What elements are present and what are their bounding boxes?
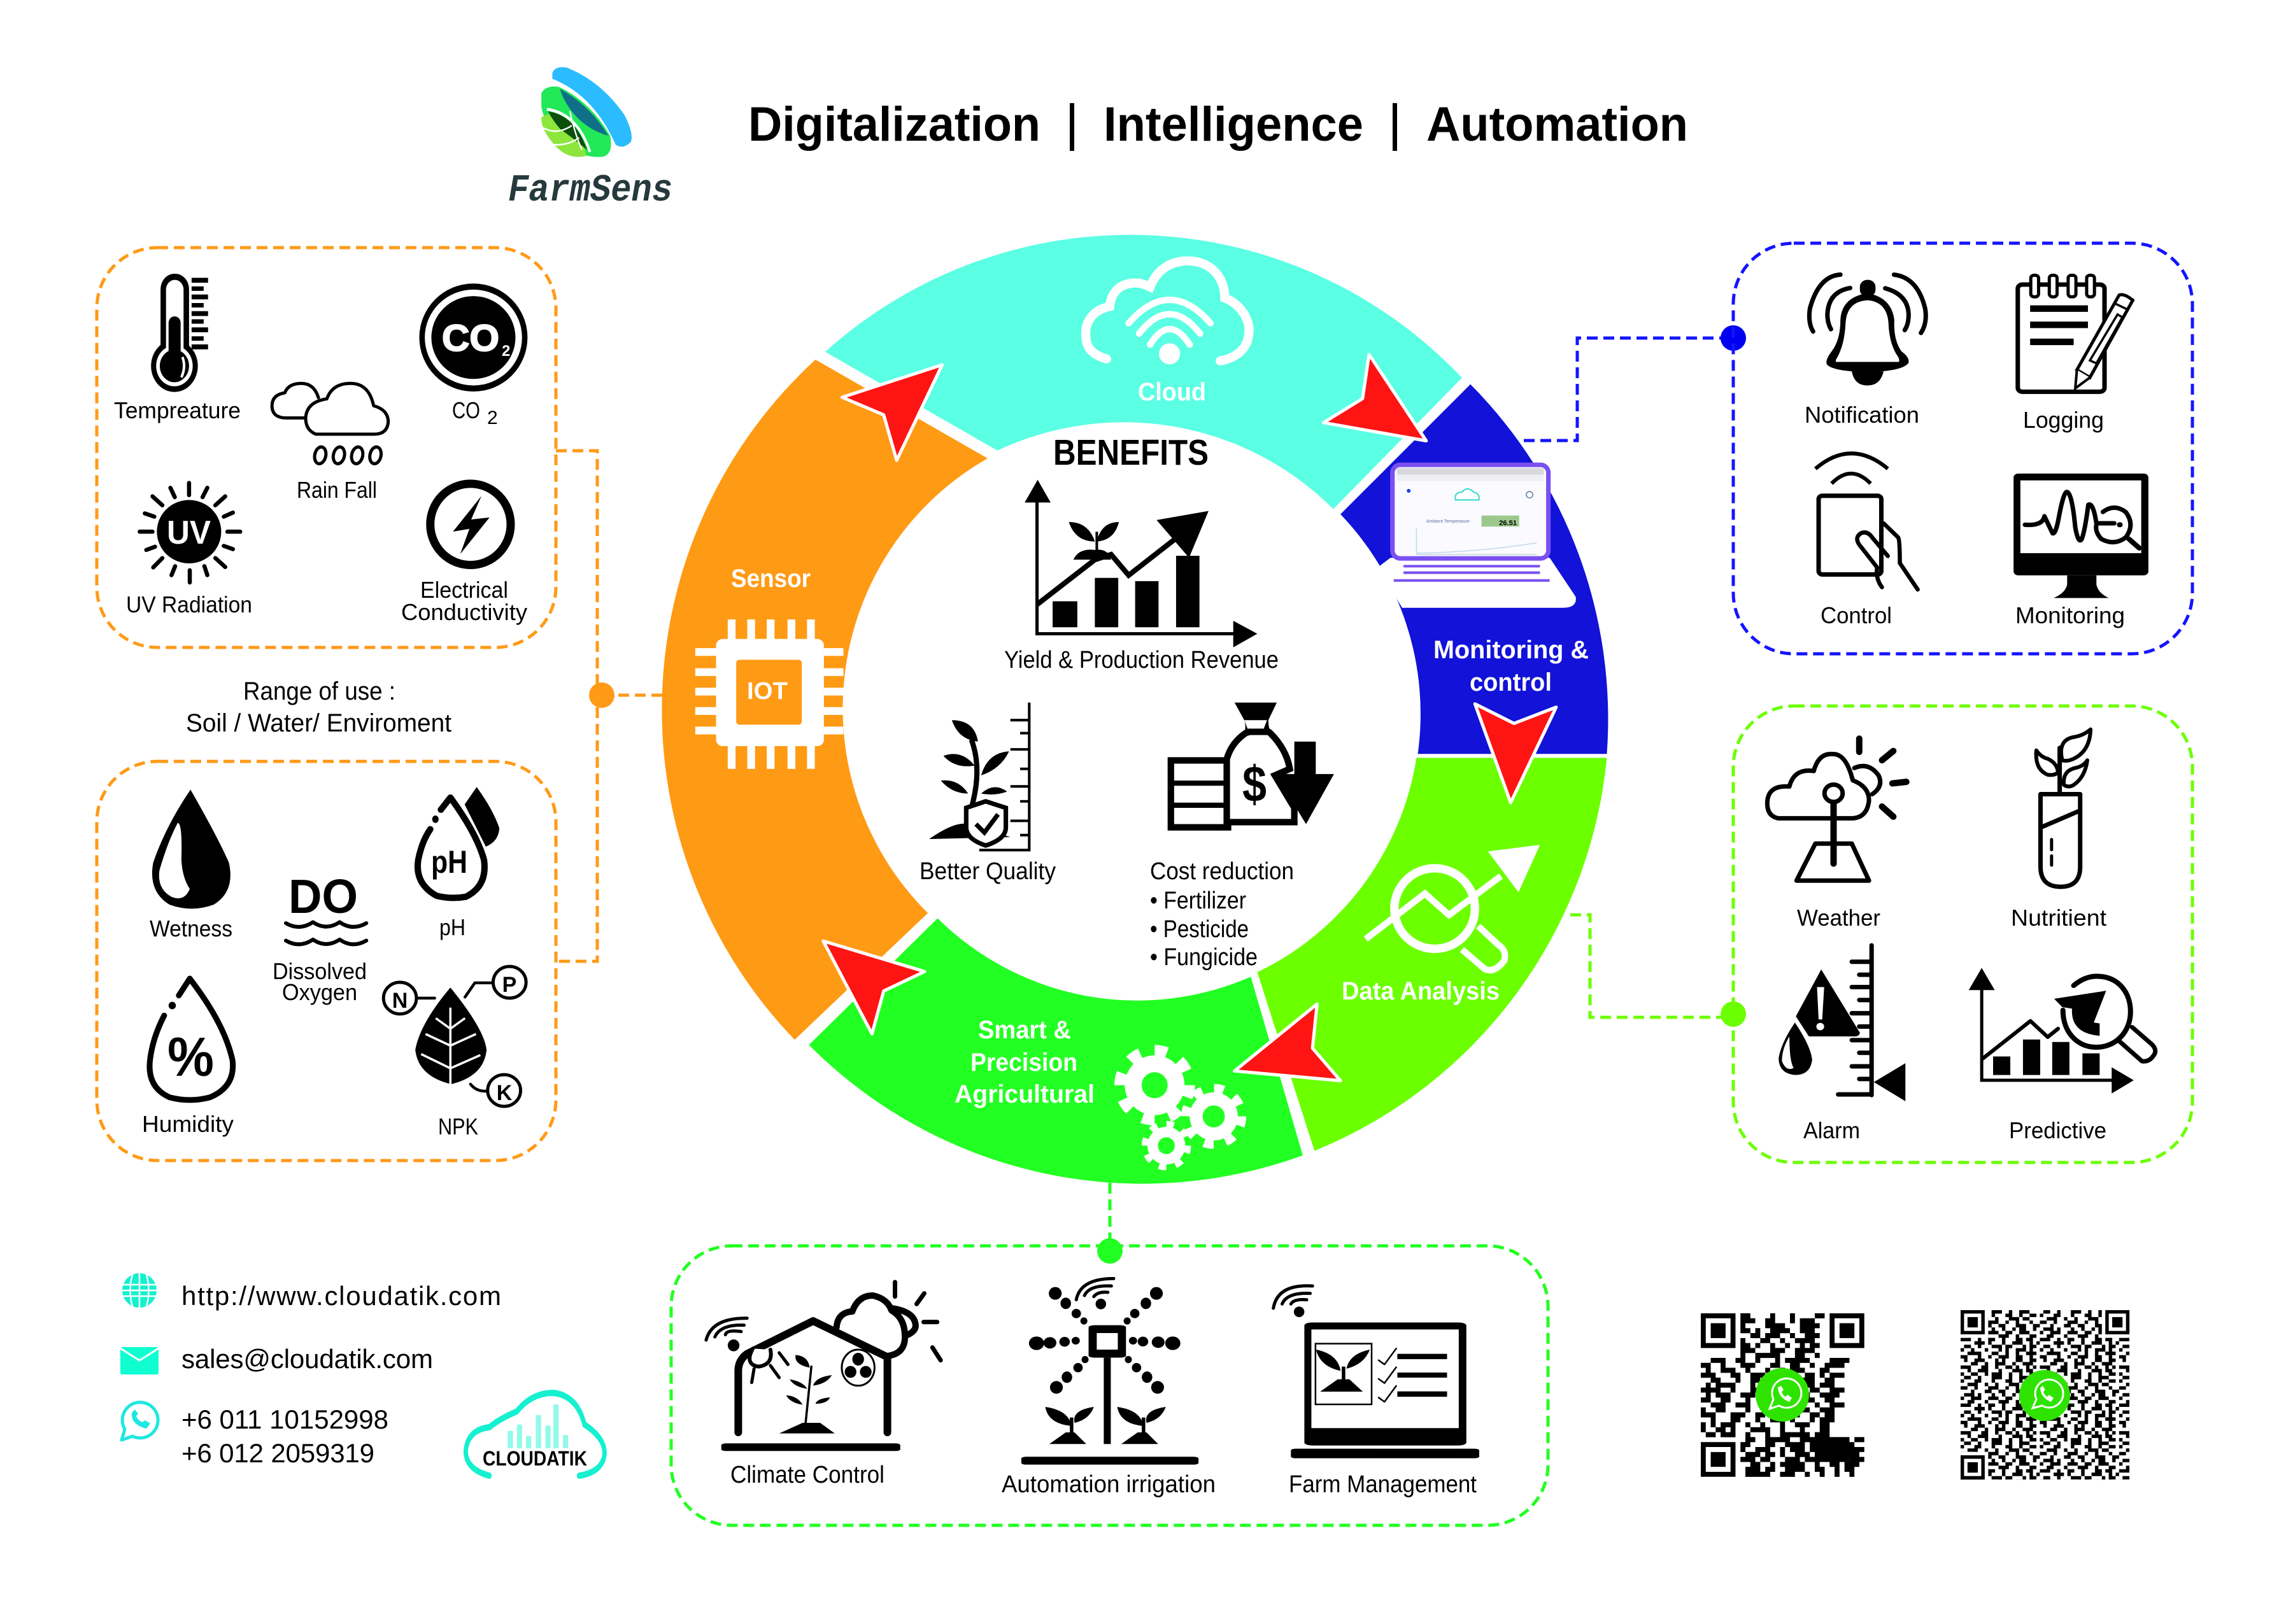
icon: wetness drop	[152, 789, 231, 908]
icon: alarm level gauge	[1778, 945, 1905, 1101]
icon: UV sun	[139, 483, 240, 583]
label: climate control: Climate Control	[730, 1462, 884, 1488]
ring labels	[731, 378, 1589, 1108]
icon: humidity drop	[150, 978, 233, 1100]
QR code: second	[1961, 1310, 2129, 1479]
icon: rain clouds	[272, 383, 388, 465]
label: electrical conductivity: Conductivity	[401, 599, 527, 625]
label: CO2: CO	[452, 397, 480, 423]
label: wetness: Wetness	[150, 915, 232, 942]
label: pH: pH	[439, 914, 465, 940]
icon: thermometer	[151, 274, 208, 392]
panel: data analysis	[1733, 706, 2192, 1162]
label: CO2	[452, 397, 498, 428]
icon: gears	[1120, 1051, 1242, 1167]
logo: Cloudatik: CLOUDATIK	[483, 1447, 587, 1470]
label: notification: Notification	[1805, 402, 1919, 428]
icon: pH drop	[418, 787, 499, 898]
icon: nutrient test tube	[2036, 730, 2091, 887]
label: weather: Weather	[1797, 905, 1880, 931]
ring labels: Sensor	[731, 565, 811, 593]
icon: whatsapp badge	[2033, 1380, 2063, 1408]
panel: smart agriculture applications	[671, 1246, 1548, 1525]
icon: electrical conductivity	[430, 484, 511, 565]
connector: monitoring panel to ring	[1524, 325, 1746, 441]
ring labels: Agricultural	[955, 1080, 1095, 1108]
icon: better quality plant	[929, 703, 1029, 850]
icon: predictive chart	[1969, 968, 2155, 1094]
ring segments and arrows	[662, 235, 1608, 1183]
segment: sensor	[662, 360, 988, 1040]
contact: phone numbers: +6 011 10152998	[181, 1404, 388, 1434]
QR code: first	[1701, 1313, 1864, 1477]
icon: laptop dashboard: 26.51	[1499, 519, 1517, 527]
connector: smart agriculture panel to ring	[1097, 1183, 1123, 1264]
title: Digitalization	[748, 97, 1040, 152]
label: nutrient: Nutritient	[2011, 905, 2106, 931]
segment: cloud	[825, 235, 1462, 509]
label: cost reduction list	[1150, 858, 1294, 971]
icon: NPK leaf: P	[502, 973, 516, 997]
icon: dissolved oxygen: DO	[288, 870, 358, 923]
label: temperature: Tempreature	[114, 397, 241, 423]
label: alarm: Alarm	[1803, 1117, 1860, 1143]
ring labels: IOT	[747, 678, 788, 705]
arrow: smart agriculture to sensor	[823, 941, 925, 1034]
arrow: cloud to monitoring	[1324, 355, 1426, 441]
icon: IOT chip	[695, 619, 843, 769]
icon: FarmSens leaf mark	[541, 67, 632, 157]
icon: logging notebook	[2018, 275, 2133, 392]
icon: CO2 badge: 2	[502, 342, 510, 360]
label: control: Control	[1821, 602, 1892, 628]
contact details	[120, 1273, 501, 1468]
icon: CO2 badge	[420, 283, 527, 392]
label: cost reduction list: • Pesticide	[1150, 916, 1249, 943]
label: dissolved oxygen: Dissolved	[273, 958, 367, 984]
logo wordmark: FarmSens	[508, 169, 672, 213]
contact: email: sales@cloudatik.com	[181, 1344, 433, 1374]
icon: globe	[122, 1273, 157, 1308]
label: automation irrigation: Automation irrigation	[1002, 1471, 1216, 1498]
icon: NPK leaf: N	[392, 989, 408, 1013]
panel: environment sensors	[97, 248, 556, 647]
icon: cloud wifi	[1086, 261, 1249, 364]
icon: dissolved oxygen	[286, 870, 366, 944]
icon: whatsapp badge	[1770, 1378, 1801, 1409]
label: cost reduction list: • Fungicide	[1150, 944, 1258, 971]
icon: CO2 badge: CO	[442, 318, 499, 359]
label: yield: Yield & Production Revenue	[1004, 647, 1279, 674]
label: UV radiation: UV Radiation	[126, 591, 252, 618]
ring labels: Precision	[970, 1049, 1077, 1077]
label: dissolved oxygen	[273, 958, 367, 1005]
ring labels: Smart &	[978, 1016, 1071, 1044]
label: logging: Logging	[2023, 407, 2104, 433]
label: electrical conductivity: Electrical	[420, 577, 508, 603]
panel: monitoring and control	[1733, 243, 2192, 654]
icon: data analysis magnifier	[1366, 845, 1540, 970]
ring labels: Data Analysis	[1342, 977, 1500, 1005]
panel: benefits	[919, 432, 1334, 971]
label: farm management: Farm Management	[1289, 1471, 1477, 1498]
segment: data analysis	[1257, 758, 1607, 1151]
ring labels: control	[1470, 668, 1552, 696]
ring labels: Cloud	[1138, 378, 1206, 406]
ring labels: Monitoring &	[1433, 636, 1589, 664]
label: dissolved oxygen: Oxygen	[282, 979, 357, 1005]
label: rain fall: Rain Fall	[297, 477, 377, 503]
contact: website: http://www.cloudatik.com	[181, 1281, 501, 1311]
icon: farm management laptop	[1274, 1286, 1479, 1458]
label: NPK: NPK	[438, 1113, 478, 1140]
icon: climate control greenhouse	[706, 1282, 941, 1451]
arrow: monitoring to data analysis	[1475, 704, 1556, 803]
icon: cost reduction	[1171, 703, 1334, 828]
icon: yield chart	[1025, 480, 1257, 647]
label: cost reduction list: • Fertilizer	[1150, 887, 1246, 914]
segment: monitoring	[1340, 385, 1608, 754]
arrow: data analysis to smart agriculture	[1235, 1004, 1340, 1081]
icon: laptop dashboard	[1377, 465, 1576, 608]
icon: notification bell	[1809, 274, 1926, 386]
icon: automation irrigation	[1021, 1278, 1198, 1465]
label: electrical conductivity	[401, 577, 527, 625]
text: range of use: Range of use :	[243, 677, 395, 705]
icon: NPK leaf: K	[497, 1081, 513, 1105]
title	[748, 97, 1688, 152]
label: better quality: Better Quality	[919, 858, 1056, 885]
contact: phone numbers: +6 012 2059319	[181, 1438, 374, 1468]
ring diagram	[662, 235, 1608, 1183]
icon: laptop dashboard: Ambient Temperature	[1426, 519, 1470, 524]
icon: control tablet	[1815, 453, 1918, 590]
title: Automation	[1426, 97, 1688, 152]
label: predictive: Predictive	[2009, 1117, 2106, 1143]
label: cost reduction list: Cost reduction	[1150, 858, 1294, 885]
title: Intelligence	[1104, 97, 1363, 152]
logo: Cloudatik	[465, 1393, 605, 1476]
icon: weather station	[1767, 738, 1906, 880]
icon: envelope	[120, 1347, 159, 1374]
arrow: sensor to cloud	[842, 365, 942, 460]
icon: UV sun: UV	[167, 514, 211, 551]
icon: monitoring screen	[2013, 474, 2148, 598]
connector: sensor panels to ring	[556, 451, 669, 961]
icon: whatsapp outline	[122, 1402, 158, 1440]
label: humidity: Humidity	[142, 1111, 234, 1137]
segment: smart agriculture	[809, 918, 1303, 1183]
connector: data analysis panel to ring	[1570, 915, 1746, 1027]
logo: FarmSens	[508, 67, 672, 213]
icon: humidity drop: %	[167, 1027, 214, 1088]
label: CO2: 2	[487, 407, 498, 428]
panel: soil and water sensors	[97, 761, 556, 1161]
text: range of use: Soil / Water/ Enviroment	[186, 709, 451, 737]
icon: NPK leaf	[383, 966, 526, 1106]
text: range of use	[186, 677, 451, 737]
icon: cost reduction: $	[1242, 756, 1267, 812]
heading: benefits: BENEFITS	[1053, 432, 1209, 473]
icon: pH drop: pH	[431, 844, 467, 880]
contact: phone numbers	[181, 1404, 388, 1468]
label: monitoring: Monitoring	[2015, 602, 2125, 628]
